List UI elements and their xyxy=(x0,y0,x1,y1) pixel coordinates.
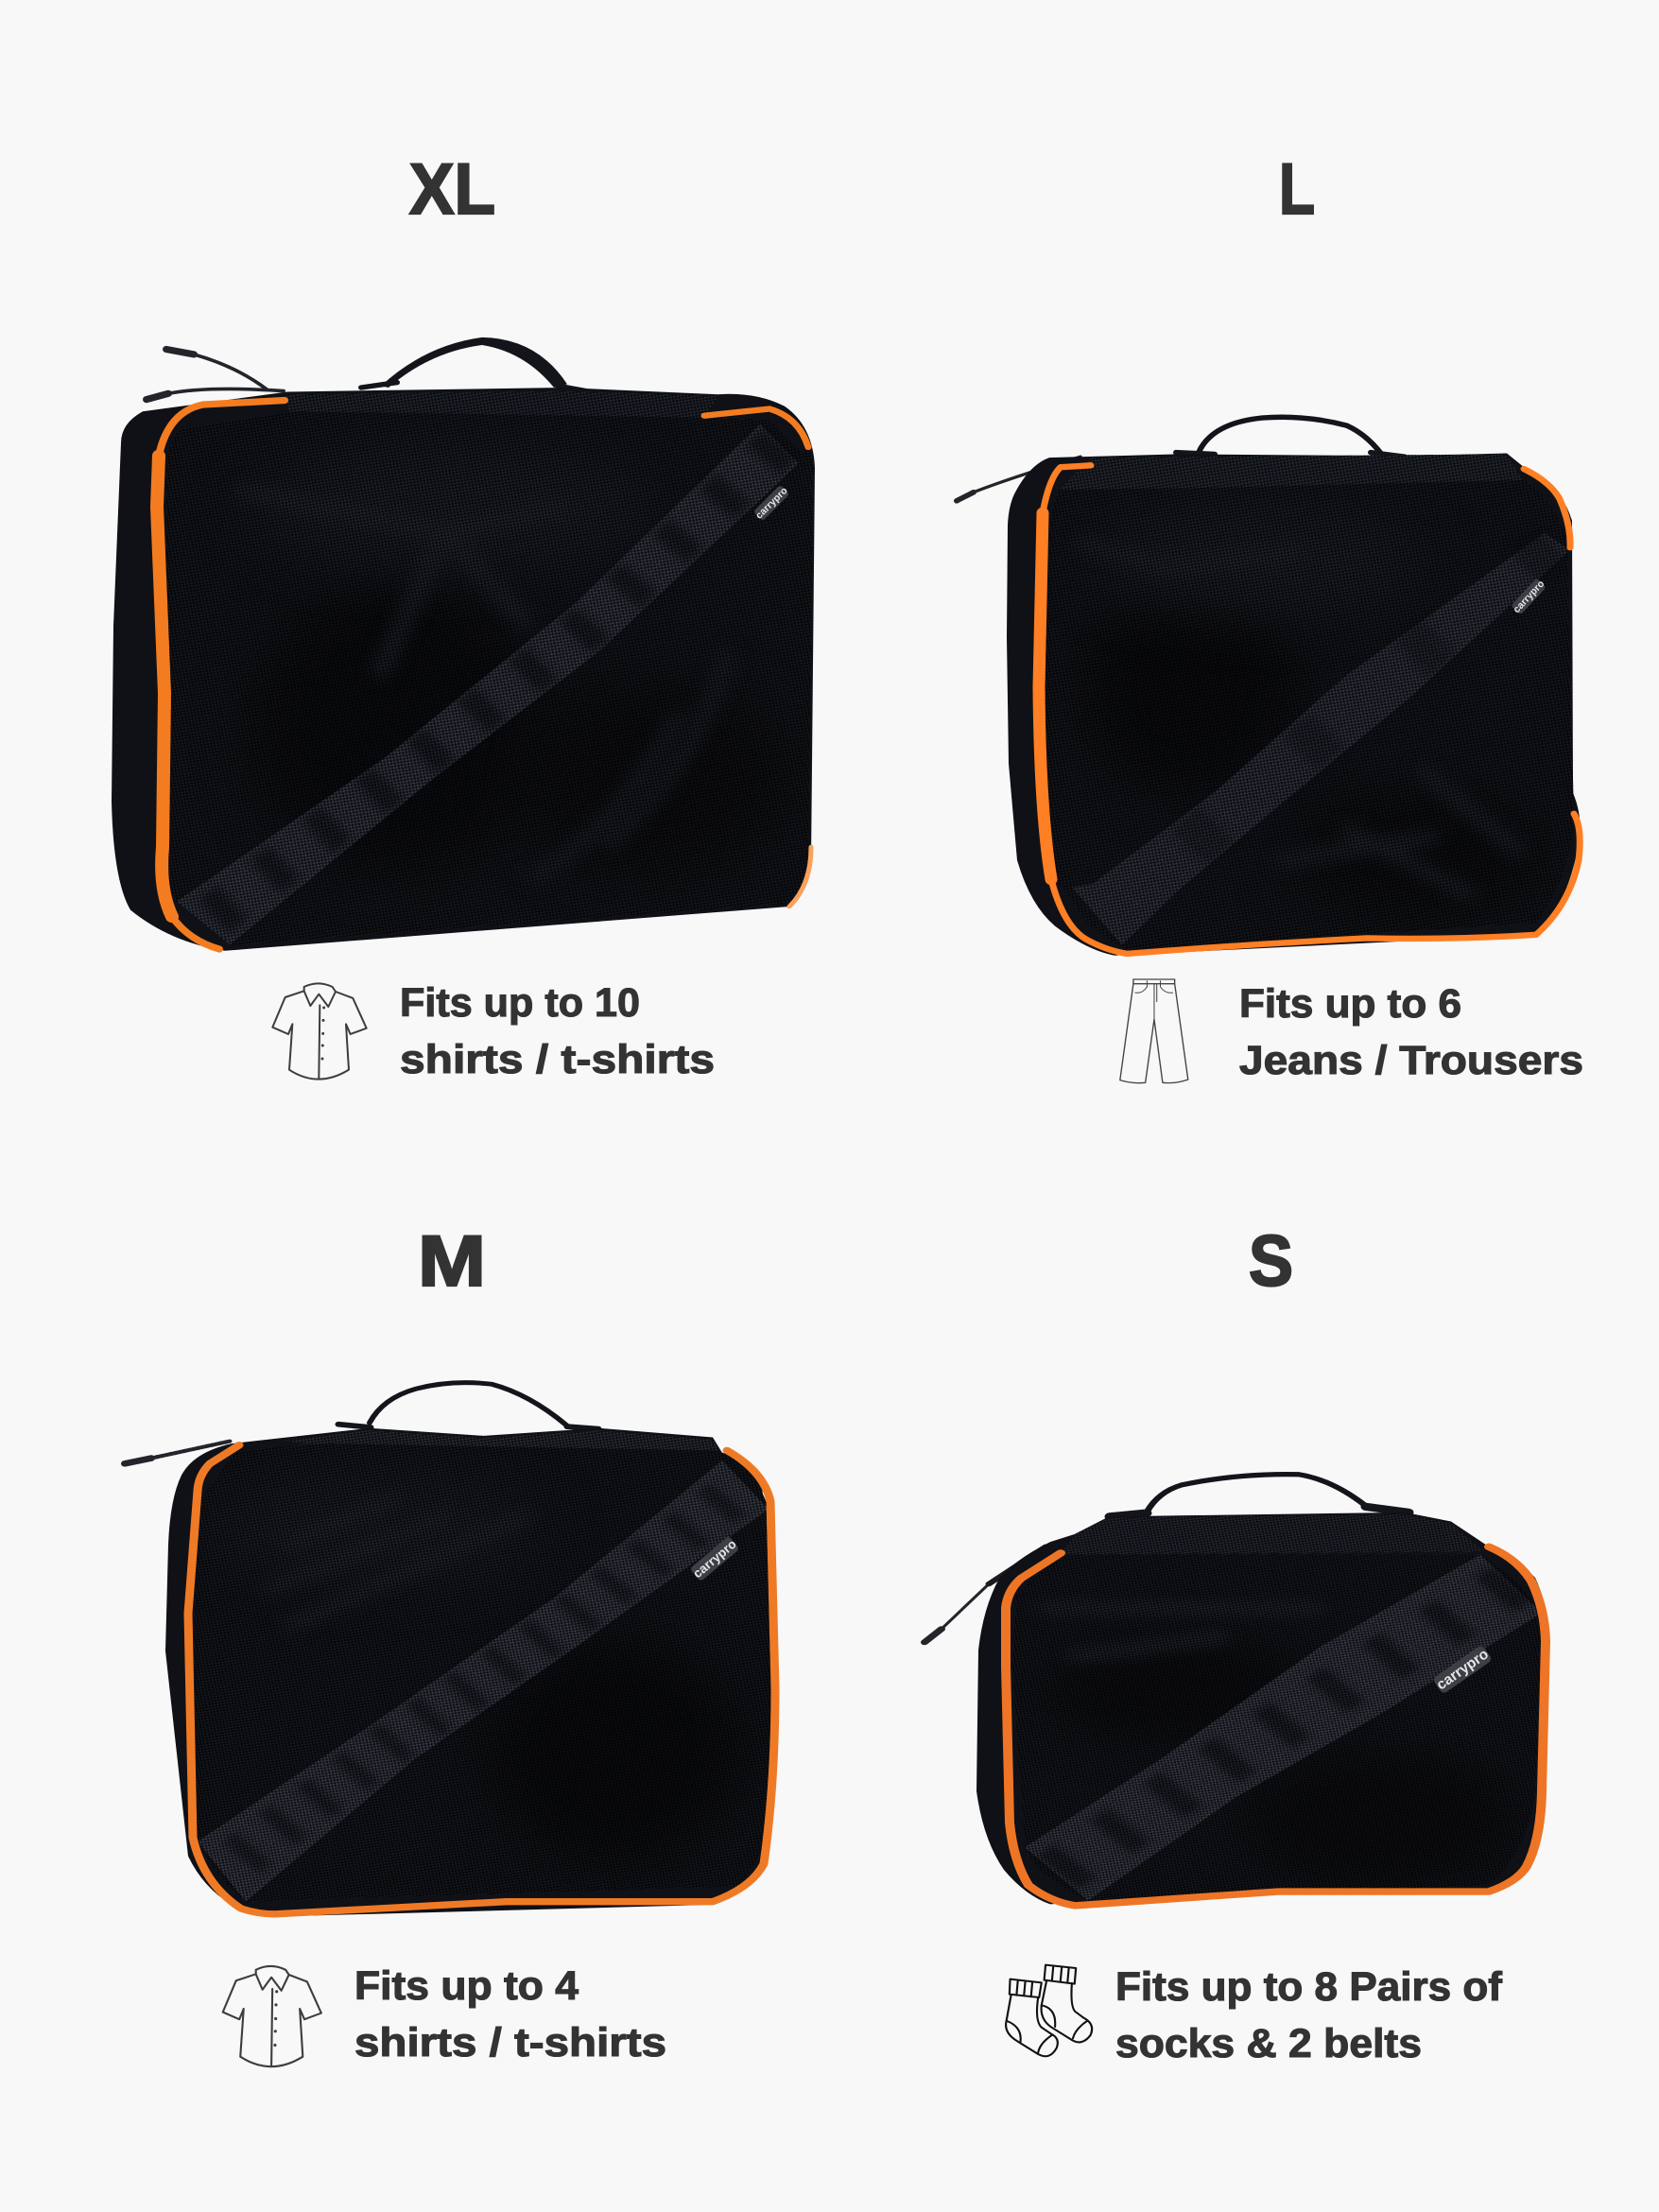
heading: L: L xyxy=(1279,149,1315,230)
icon: socks (S) xyxy=(1006,1965,1092,2056)
icon: shirt (XL) xyxy=(272,983,367,1080)
M mesh front xyxy=(184,1437,780,1907)
XL zipper pulls xyxy=(147,350,284,400)
caption: S capacity: Fits up to 8 Pairs of xyxy=(1115,1964,1503,2010)
XL orange zipper xyxy=(157,401,811,949)
S orange zipper xyxy=(1006,1547,1546,1906)
heading: M: M xyxy=(418,1221,486,1302)
M diagonal strap xyxy=(198,1460,769,1902)
M carrypro label: carrypro xyxy=(690,1537,739,1581)
M handle xyxy=(338,1383,598,1429)
M bag body xyxy=(165,1428,777,1916)
S mesh front xyxy=(1002,1545,1555,1907)
caption: S capacity: socks & 2 belts xyxy=(1115,2021,1422,2066)
S carrypro label: carrypro xyxy=(1434,1646,1492,1693)
L orange zipper xyxy=(1039,465,1580,954)
S zipper pull xyxy=(925,1547,1046,1642)
caption: L capacity xyxy=(1239,981,1583,1083)
L zipper pull xyxy=(957,457,1080,501)
S handle xyxy=(1110,1475,1408,1516)
S diagonal strap xyxy=(1025,1554,1542,1901)
L top panel xyxy=(1059,454,1524,491)
S bag body xyxy=(976,1512,1548,1904)
heading: XL: XL xyxy=(409,149,495,230)
caption: M capacity: shirts / t-shirts xyxy=(354,2020,666,2065)
M bag artwork xyxy=(125,1383,780,1916)
caption: XL capacity: shirts / t-shirts xyxy=(400,1037,715,1082)
XL diagonal strap xyxy=(177,424,799,945)
L carrypro label: carrypro xyxy=(1511,579,1547,615)
S bag artwork xyxy=(925,1475,1555,1907)
panel: L bag xyxy=(957,417,1588,961)
XL bag artwork xyxy=(112,337,822,958)
caption: XL capacity: Fits up to 10 xyxy=(400,980,640,1026)
XL carrypro label: carrypro xyxy=(753,485,790,522)
panel: M bag xyxy=(125,1383,780,1916)
XL handle xyxy=(361,337,586,391)
S top panel xyxy=(1061,1514,1484,1554)
XL top panel xyxy=(287,391,718,420)
XL mesh front xyxy=(151,396,822,958)
icon: jeans (L) xyxy=(1120,979,1188,1083)
panel: S bag xyxy=(925,1475,1555,1907)
caption: M capacity: Fits up to 4 xyxy=(354,1963,579,2009)
XL bag body xyxy=(112,388,815,951)
L diagonal strap xyxy=(1072,533,1570,945)
L bag artwork xyxy=(957,417,1588,961)
M top panel xyxy=(284,1430,720,1452)
caption: XL capacity xyxy=(400,980,715,1082)
L bag body xyxy=(1007,454,1581,956)
L mesh front xyxy=(1030,469,1588,961)
L handle xyxy=(1176,417,1405,457)
caption: L capacity: Jeans / Trousers xyxy=(1239,1038,1583,1083)
M zipper pull xyxy=(125,1442,230,1463)
caption: M capacity xyxy=(354,1963,666,2065)
heading: S: S xyxy=(1249,1221,1293,1302)
icon: shirt (M) xyxy=(223,1966,321,2066)
M orange zipper xyxy=(188,1445,775,1914)
caption: S capacity xyxy=(1115,1964,1503,2066)
panel: XL bag xyxy=(112,337,822,958)
caption: L capacity: Fits up to 6 xyxy=(1239,981,1461,1027)
